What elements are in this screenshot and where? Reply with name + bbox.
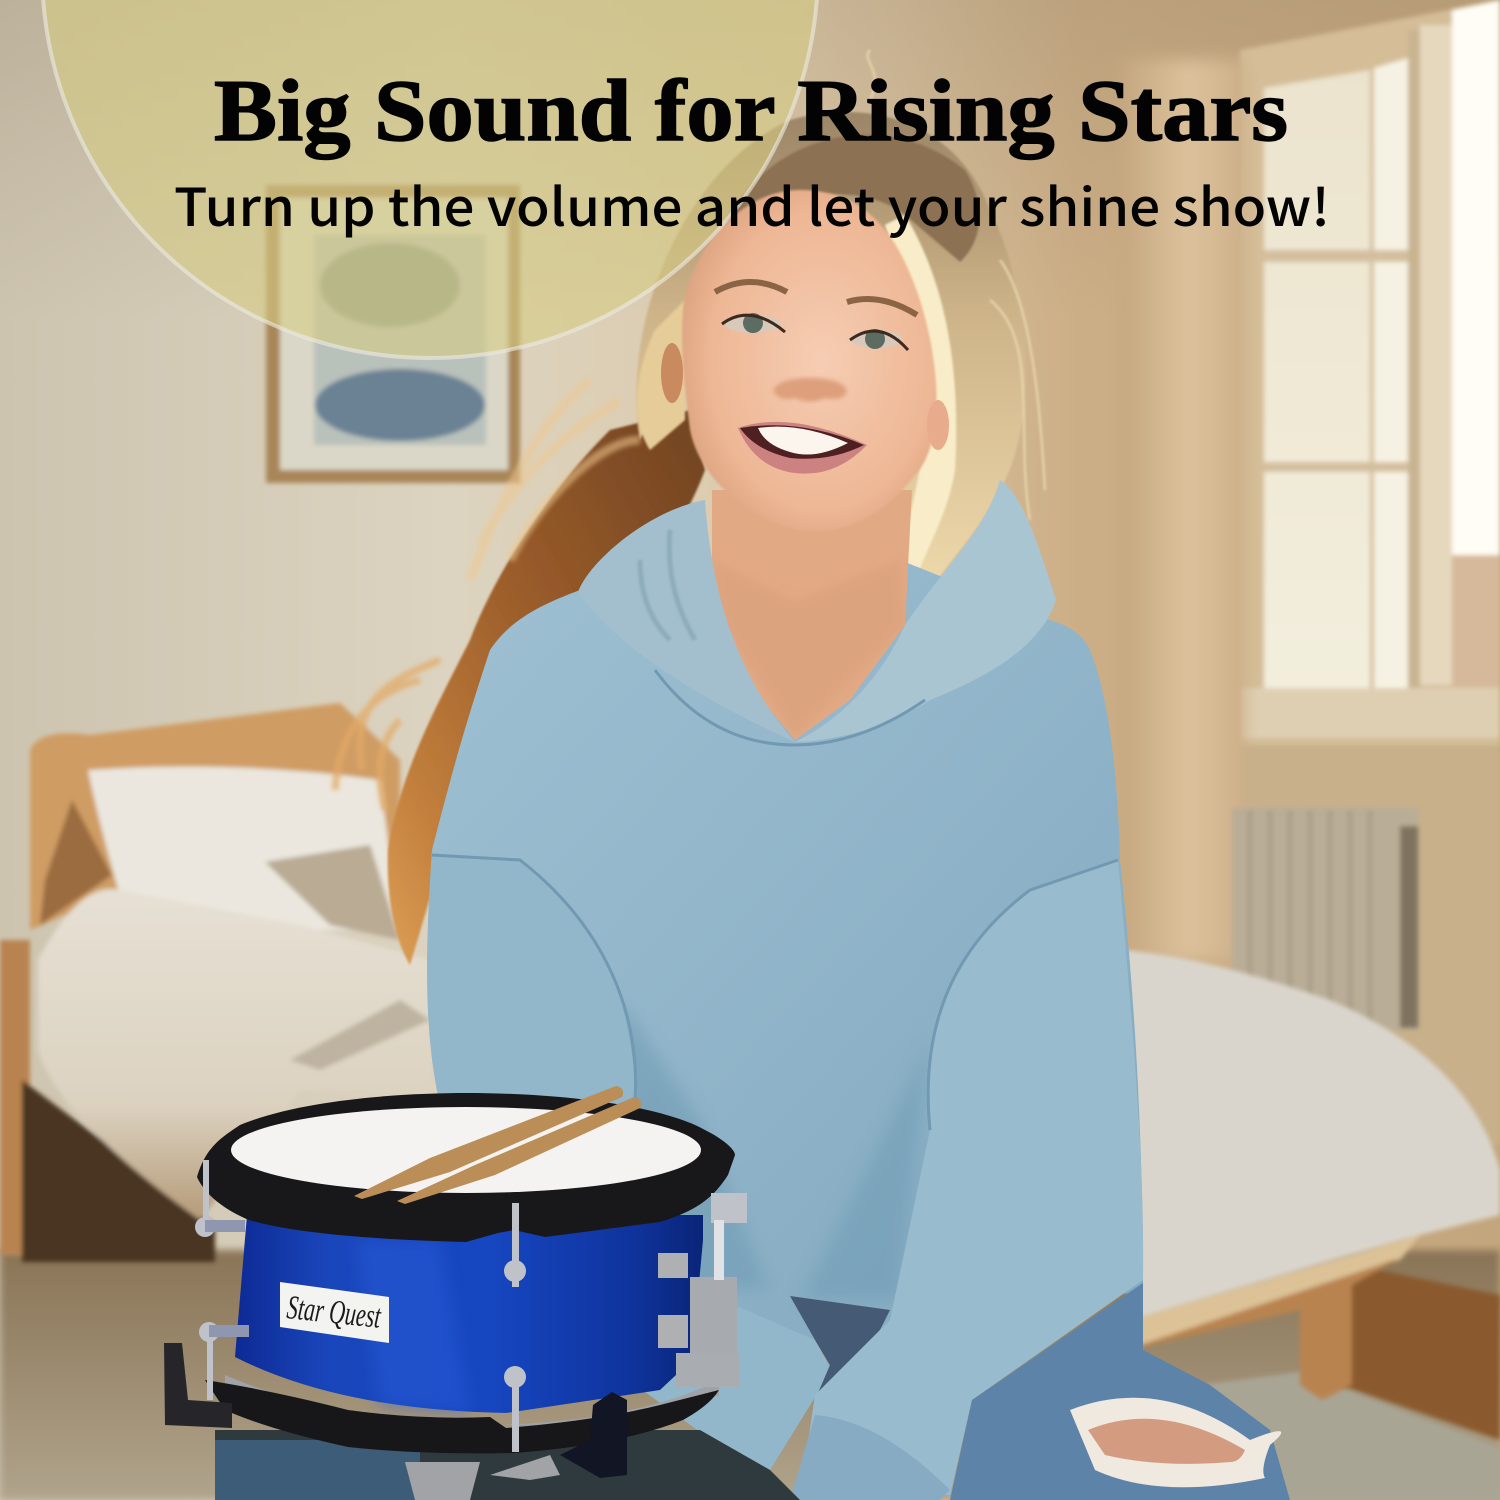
- hair head top: [636, 50, 1045, 620]
- floor: [0, 1250, 1500, 1500]
- right eye: [850, 329, 908, 350]
- window: [1240, 0, 1500, 1145]
- bed left: headboard, mattress and pillows: [0, 703, 430, 1262]
- eyebrows: [715, 282, 917, 315]
- jeans: [215, 1283, 1290, 1500]
- hoodie: [427, 480, 1143, 1500]
- left eye: [722, 313, 785, 333]
- drum head: [231, 1107, 701, 1193]
- drum sticks: [354, 1086, 641, 1204]
- shell sparkle band: [355, 1240, 470, 1413]
- shadow under left sleeve: [620, 1000, 770, 1290]
- silver lower ring: [225, 1375, 719, 1425]
- jeans under arms: [790, 1296, 890, 1400]
- top rim: [197, 1093, 735, 1242]
- bed right: duvet and wooden frame: [1120, 950, 1500, 1400]
- neck: [712, 490, 912, 740]
- drum shell: [235, 1215, 703, 1413]
- cuff: [790, 1415, 950, 1500]
- chrome lugs: [195, 1160, 747, 1452]
- right ear: [927, 400, 949, 450]
- rug right: [1200, 1372, 1500, 1500]
- bracket right: [560, 1392, 627, 1478]
- title: Big Sound for Rising Stars: [214, 63, 1288, 160]
- hood collar left: [578, 500, 795, 742]
- smile: [738, 422, 867, 474]
- bottom hoop: [205, 1380, 719, 1453]
- curtain: [1120, 60, 1245, 960]
- hoodie body: [428, 560, 1143, 1340]
- stand: [405, 1455, 560, 1500]
- wood floor right: [1340, 1262, 1500, 1440]
- nose: [773, 378, 847, 402]
- right sleeve: [800, 860, 1143, 1495]
- face: [661, 190, 949, 531]
- translucent title circle: [42, 0, 818, 358]
- logo badge: Star Quest: [285, 1289, 384, 1336]
- subtitle: Turn up the volume and let your shine show!: [174, 166, 1330, 241]
- framed picture on wall: [266, 185, 520, 483]
- radiator: [1232, 808, 1418, 1030]
- drum: [164, 1086, 747, 1500]
- bracket left: [164, 1343, 232, 1428]
- left ear: [661, 343, 683, 403]
- hair ponytail: [335, 380, 705, 965]
- logo badge: [280, 1282, 389, 1343]
- left sleeve: [427, 855, 832, 1470]
- shadow right of torso: [800, 1040, 930, 1300]
- hood collar right: [795, 480, 1056, 742]
